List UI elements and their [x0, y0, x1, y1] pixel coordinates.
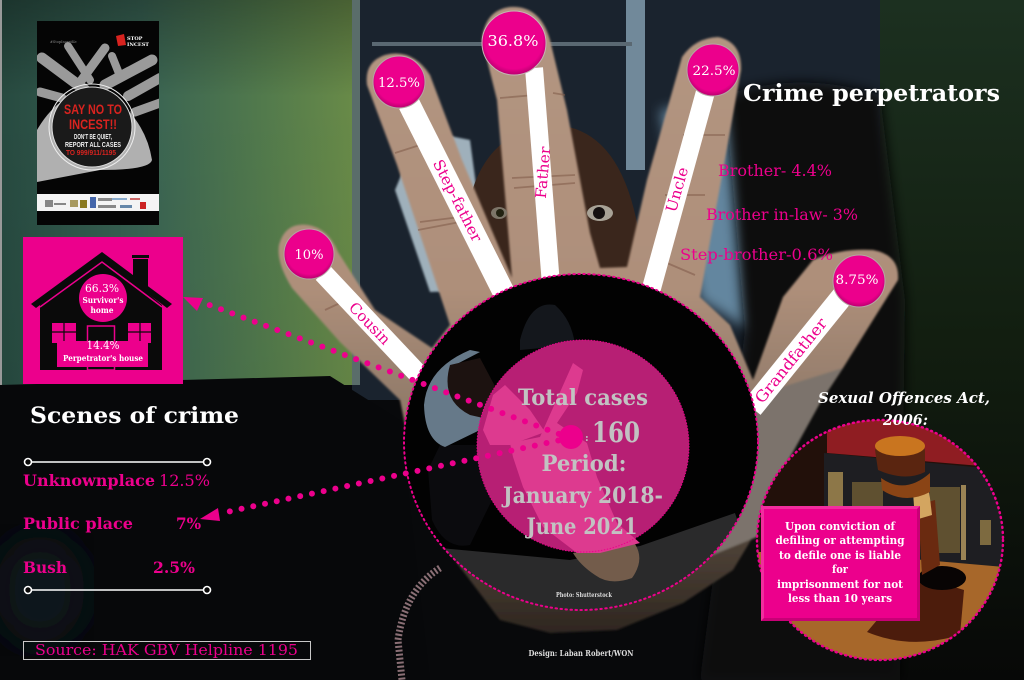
finger strip: uncle [651, 90, 706, 290]
callout: penalty: to defile one is liable [779, 549, 901, 562]
scenes list: Unknownplace [23, 471, 155, 490]
heading: sexual offences act: Sexual Offences Act, [818, 389, 990, 407]
total cases circle: Period: [542, 451, 626, 477]
percent badge: father 36.8%: 36.8% [488, 32, 538, 50]
finger strip: father [532, 68, 554, 285]
other perpetrators list [680, 162, 858, 264]
central photo circle [400, 270, 770, 620]
perpetrator's house label: 14.4% [86, 339, 120, 352]
callout: penalty: less than 10 years [788, 592, 892, 605]
poster: say no to incest: DON'T BE QUIET, [74, 134, 112, 141]
central photo circle outline [404, 274, 758, 610]
finger strip: cousin [323, 273, 420, 376]
perpetrator's house label: Perpetrator's house [63, 353, 143, 363]
poster: say no to incest [37, 21, 160, 225]
floor [445, 513, 738, 610]
callout: penalty: imprisonment for not [777, 578, 904, 591]
total cases circle [477, 340, 689, 553]
poster: say no to incest: TO 999/911/1195 [66, 150, 116, 157]
percent badge: grandfather 8.75%: 8.75% [836, 273, 878, 288]
scenes list [23, 471, 210, 577]
percent badge: father 36.8% [482, 11, 546, 75]
finger strip: grandfather: Grandfather [751, 314, 831, 407]
poster: say no to incest: #StopIncestKe [50, 40, 77, 44]
poster: say no to incest: INCEST [127, 42, 149, 48]
photo credit: Photo: Shutterstock [556, 591, 612, 599]
total cases circle: Total cases [518, 385, 648, 411]
survivor's home circle [79, 274, 127, 322]
total cases circle: June 2021 [525, 514, 638, 540]
foot [573, 544, 639, 581]
finger strip: step-father: Step-father [429, 157, 486, 246]
percent badge: step-father 12.5% [373, 56, 425, 108]
girl silhouette overlay [510, 363, 640, 553]
callout: penalty: Upon conviction of [785, 520, 896, 533]
arrow: to public place [200, 438, 570, 521]
divider top [24, 458, 210, 594]
scenes list: Bush [23, 558, 67, 577]
percent badge: cousin 10%: 10% [294, 248, 324, 263]
other perpetrators list: Brother in-law- 3% [706, 206, 858, 224]
callout: penalty: defiling or attempting [776, 534, 905, 547]
scenes list: 12.5% [159, 471, 210, 490]
hand [279, 7, 898, 633]
perpetrator's house label [57, 339, 148, 367]
heading: crime perpetrators: Crime perpetrators [743, 80, 1000, 107]
scenes list: Public place [23, 514, 133, 533]
total cases circle: 160 [592, 416, 640, 449]
roof [31, 252, 172, 308]
scenes list: 2.5% [153, 558, 195, 577]
percent badge: grandfather 8.75% [833, 255, 885, 307]
percent badge: cousin 10% [284, 229, 334, 279]
necklace [398, 568, 440, 680]
total cases circle: January 2018- [501, 483, 663, 509]
poster: say no to incest: INCEST!! [69, 116, 117, 132]
windows [52, 323, 151, 370]
arrow: to survivor's home [183, 297, 570, 438]
other perpetrators list: Step-brother-0.6% [680, 246, 833, 264]
gavel circle outline [757, 420, 1003, 660]
other perpetrators list: Brother- 4.4% [718, 162, 832, 180]
poster: say no to incest: REPORT ALL CASES [65, 142, 121, 149]
finger strip: cousin: Cousin [345, 299, 394, 349]
shirt [424, 350, 481, 447]
survivor's home circle: home [90, 305, 114, 315]
survivor's home circle: Survivor's [82, 295, 124, 305]
callout: penalty [761, 506, 920, 621]
total cases circle: : [585, 433, 589, 444]
percent badge: step-father 12.5%: 12.5% [378, 76, 420, 91]
finger creases [325, 93, 725, 310]
finger strip: father: Father [532, 145, 554, 199]
arrow hub dot [559, 425, 583, 449]
heading: sexual offences act: 2006: [882, 411, 928, 429]
finger strip: step-father [409, 104, 505, 295]
finger strip: uncle: Uncle [662, 165, 692, 214]
percent badge: uncle 22.5% [687, 44, 739, 96]
survivor's home circle: 66.3% [85, 282, 119, 295]
finger strip: grandfather [751, 293, 845, 408]
house body [40, 255, 162, 370]
heading: scenes of crime: Scenes of crime [30, 403, 239, 429]
poster: say no to incest: STOP [127, 36, 143, 42]
scenes list: 7% [176, 514, 201, 533]
eyes in the gap between fingers [491, 205, 613, 221]
callout: penalty: for [832, 563, 848, 576]
poster: say no to incest: SAY NO TO [64, 101, 122, 117]
source box: Source: HAK GBV Helpline 1195 [35, 641, 298, 659]
gavel circle [750, 415, 1010, 665]
design credit: Design: Laban Robert/WON [528, 649, 634, 659]
heading: sexual offences act [818, 389, 990, 429]
percent badge: uncle 22.5%: 22.5% [692, 64, 736, 79]
hair [520, 304, 575, 350]
panel: house scenes of crime [23, 237, 183, 384]
chimney [132, 255, 149, 290]
